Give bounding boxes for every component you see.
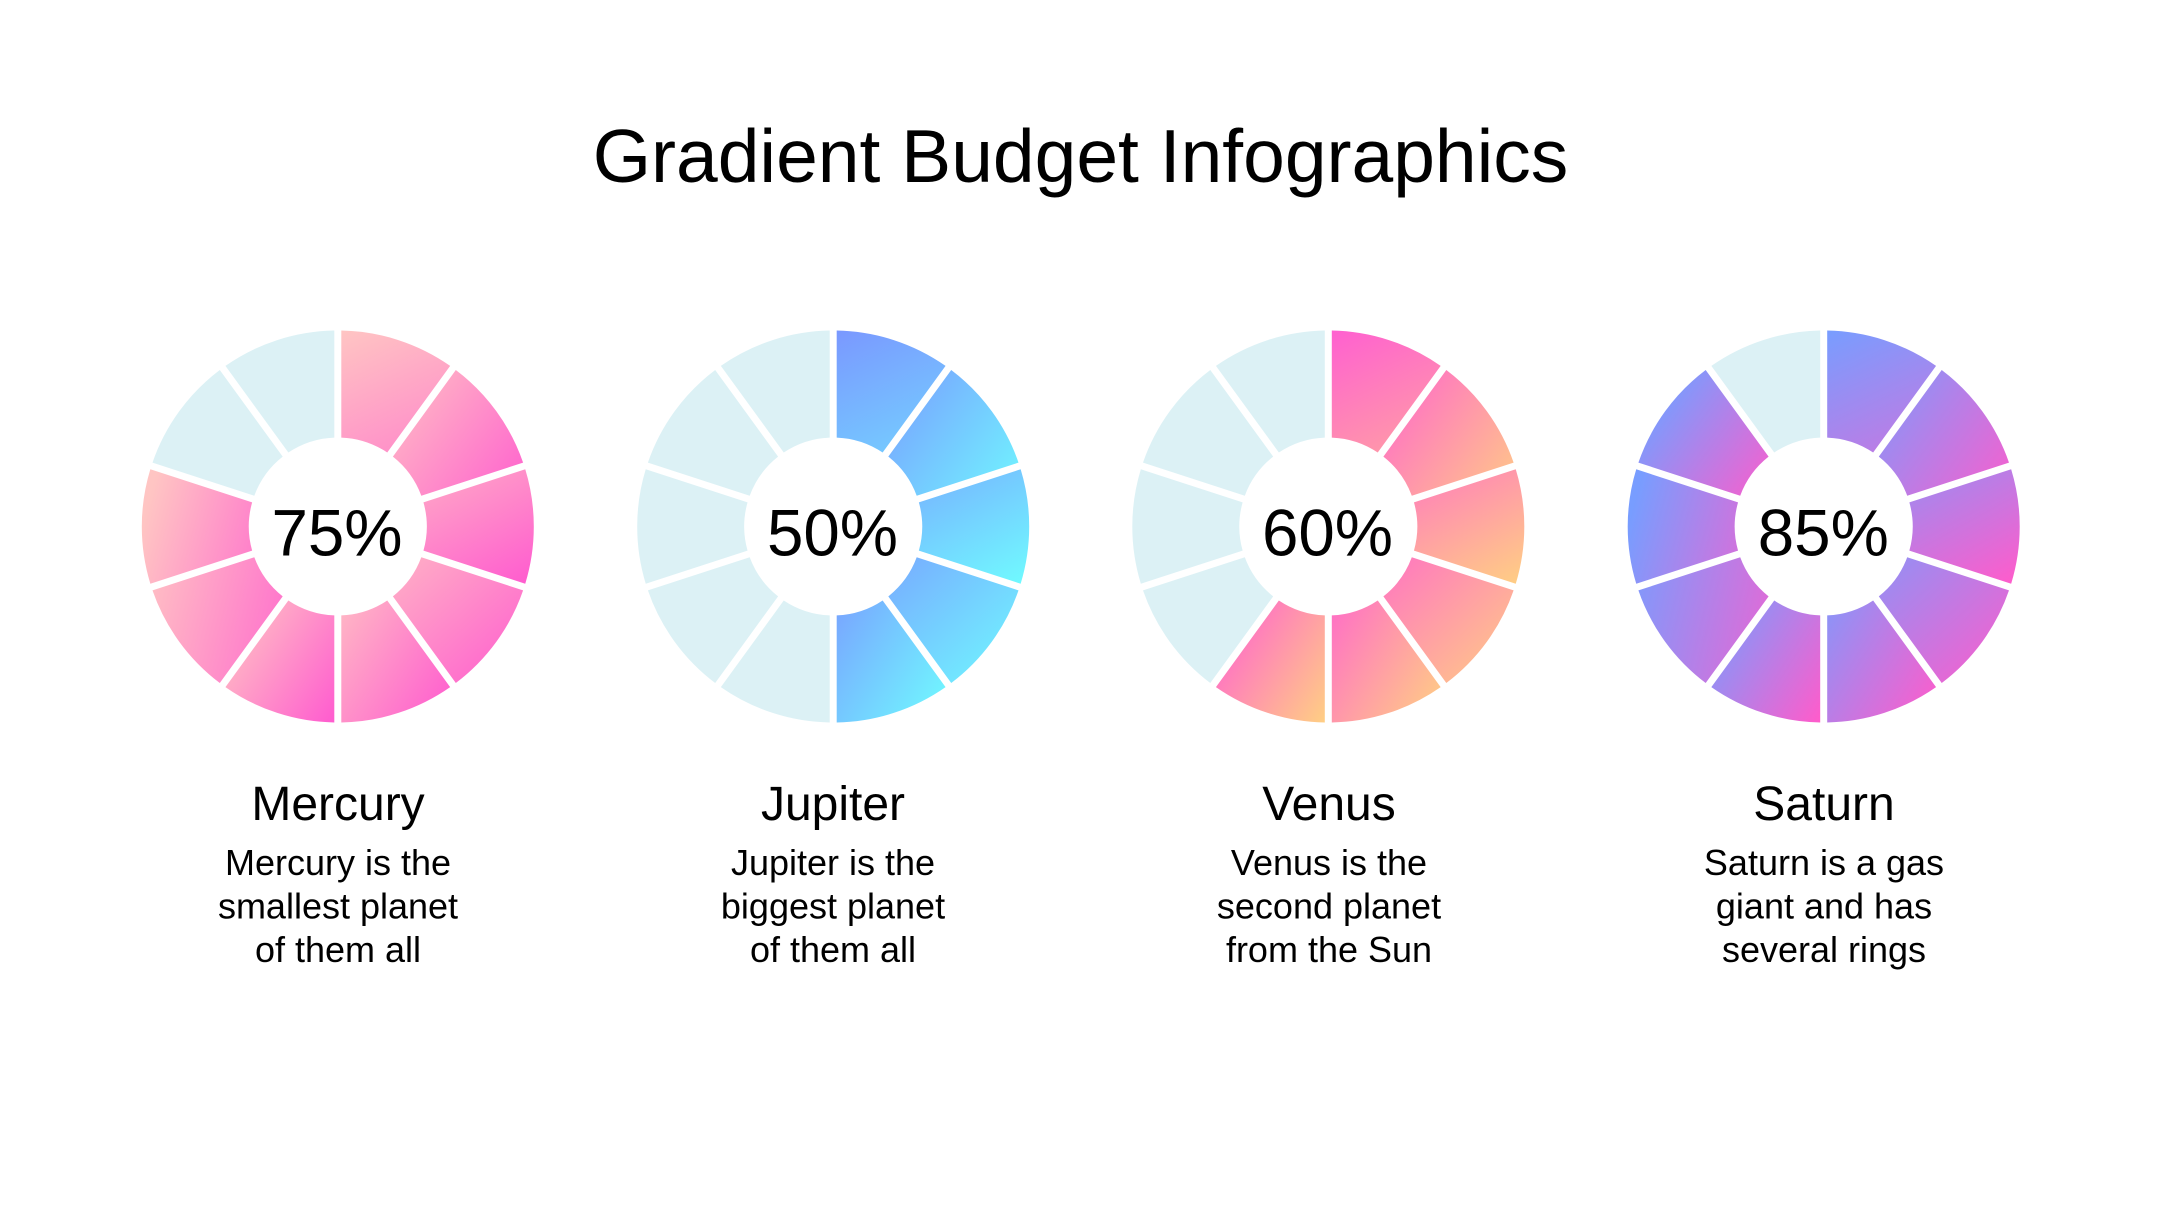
percentage: 60%: 60% (1262, 496, 1393, 570)
heading: Jupiter: Jupiter (761, 778, 905, 831)
donut chart: Jupiter 50% (637, 331, 1029, 722)
heading: Mercury: Mercury (251, 778, 425, 831)
percentage: 50%: 50% (767, 496, 898, 570)
donut chart: Mercury 75% (142, 331, 534, 722)
description: Jupiter: of them all (750, 929, 916, 970)
percentage: 75%: 75% (271, 496, 403, 570)
percentage: 85%: 85% (1758, 496, 1889, 570)
description: Jupiter: biggest planet (721, 885, 945, 926)
description: Saturn: several rings (1722, 929, 1926, 970)
panel: Saturn (1628, 331, 2020, 970)
title: Gradient Budget Infographics (593, 114, 1568, 198)
description: Mercury: smallest planet (218, 885, 458, 926)
description: Jupiter: Jupiter is the (731, 842, 935, 883)
description: Saturn: Saturn is a gas (1704, 842, 1944, 883)
description: Venus: Venus is the (1231, 842, 1427, 883)
panel: Mercury (142, 331, 534, 970)
panel: Jupiter (637, 331, 1029, 970)
description: Venus: second planet (1217, 885, 1441, 926)
description: Venus: from the Sun (1226, 929, 1432, 970)
description: Mercury: Mercury is the (225, 842, 451, 883)
heading: Saturn: Saturn (1753, 778, 1895, 831)
description: Mercury: of them all (255, 929, 421, 970)
heading: Venus: Venus (1262, 778, 1396, 831)
donut chart: Saturn 85% (1628, 331, 2020, 722)
donut chart: Venus 60% (1132, 331, 1524, 722)
panel: Venus (1132, 331, 1524, 970)
description: Saturn: giant and has (1716, 885, 1932, 926)
